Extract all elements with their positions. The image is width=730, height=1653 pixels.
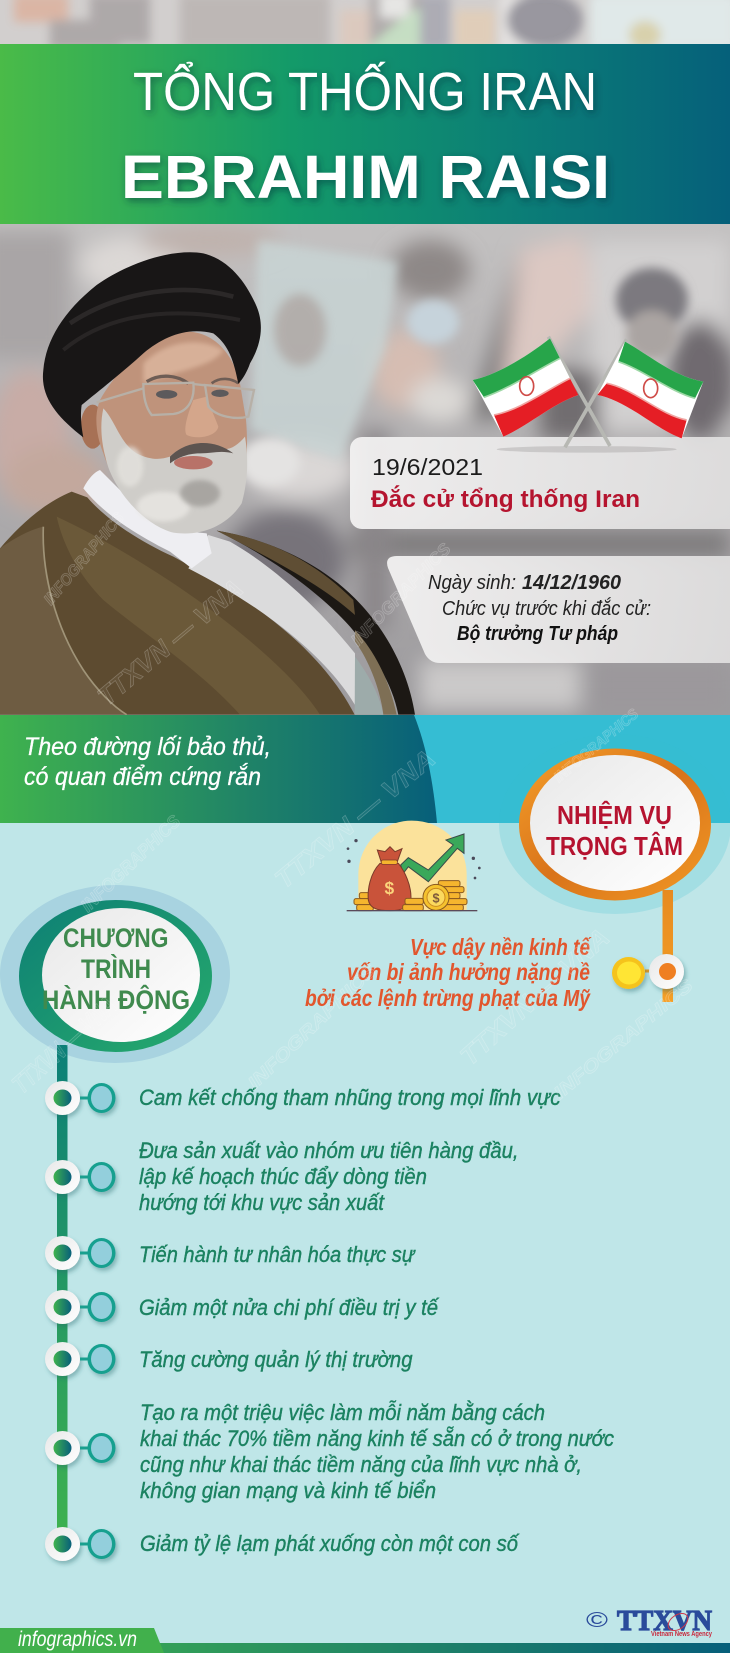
turban bbox=[43, 252, 261, 437]
action item 1: Cam kết chống tham nhũng trong mọi lĩnh vực bbox=[139, 1085, 560, 1110]
watermarks: TTXVN — VNA bbox=[269, 743, 441, 895]
title line 1: TỔNG THỐNG IRAN bbox=[133, 62, 597, 122]
nose bbox=[185, 397, 218, 437]
timeline nodes bbox=[45, 1081, 116, 1561]
badge text line 2: TRÌNH bbox=[81, 953, 151, 984]
orange connector line bbox=[662, 890, 673, 1002]
watermarks: INFOGRAPHICS bbox=[77, 811, 184, 916]
action item 6: cũng như khai thác tiềm năng của lĩnh vực nhà ở, bbox=[140, 1452, 582, 1477]
woman with mask bbox=[240, 438, 300, 486]
coin bbox=[423, 884, 449, 910]
orange halo bbox=[499, 734, 730, 914]
mission text: bởi các lệnh trừng phạt của Mỹ bbox=[305, 985, 591, 1011]
watermarks: INFOGRAPHICS bbox=[347, 539, 455, 650]
money bag bbox=[368, 863, 411, 911]
action item 2: lập kế hoạch thúc đẩy dòng tiền bbox=[139, 1164, 427, 1189]
ground line bbox=[347, 910, 477, 911]
badge: key mission bbox=[519, 748, 711, 900]
band text line 1: Theo đường lối bảo thủ, bbox=[24, 733, 271, 761]
watermarks: TTXVN — VNA bbox=[454, 922, 615, 1071]
footer tab bbox=[0, 1628, 164, 1653]
lips bbox=[174, 456, 213, 469]
title banner bbox=[0, 44, 730, 224]
badge text line 1: NHIỆM VỤ bbox=[557, 800, 672, 830]
crowd photo background bbox=[0, 222, 730, 715]
website: infographics.vn bbox=[18, 1628, 137, 1651]
date: 19/6/2021 bbox=[372, 454, 483, 480]
flags crossed bbox=[473, 337, 703, 453]
card: personal info bbox=[387, 556, 730, 663]
campaign poster bbox=[250, 240, 398, 460]
collar bbox=[83, 470, 212, 568]
poles bbox=[548, 337, 627, 447]
eyes bbox=[156, 390, 177, 399]
sparkle dots bbox=[347, 839, 481, 879]
title line 2: EBRAHIM RAISI bbox=[121, 143, 610, 211]
beard shadow bbox=[180, 480, 220, 507]
previous post label: Chức vụ trước khi đắc cử: bbox=[442, 597, 651, 620]
badge text line 3: HÀNH ĐỘNG bbox=[42, 984, 190, 1015]
action item 6: Tạo ra một triệu việc làm mỗi năm bằng cách bbox=[140, 1400, 545, 1425]
top crowd photo strip bbox=[0, 0, 730, 44]
action item 2 bbox=[139, 1138, 518, 1215]
badge text line 2: TRỌNG TÂM bbox=[546, 831, 683, 861]
previous post: Bộ trưởng Tư pháp bbox=[457, 623, 618, 645]
growth arrow bbox=[401, 834, 464, 882]
portrait of Ebrahim Raisi bbox=[0, 252, 415, 715]
action item 6: không gian mạng và kinh tế biển bbox=[140, 1478, 436, 1503]
robe left bbox=[0, 492, 355, 715]
watermarks: INFOGRAPHICS bbox=[550, 975, 697, 1103]
action item 2: Đưa sản xuất vào nhóm ưu tiên hàng đầu, bbox=[139, 1138, 518, 1163]
birth label: Ngày sinh: bbox=[428, 572, 516, 594]
robe right bbox=[217, 531, 415, 715]
orange node bbox=[612, 954, 684, 989]
watermarks: INFOGRAPHICS bbox=[244, 960, 380, 1093]
timeline line bbox=[57, 1045, 68, 1545]
badge text line 1: CHƯƠNG bbox=[63, 923, 168, 953]
action item 5: Tăng cường quản lý thị trường bbox=[139, 1347, 413, 1372]
coins left bbox=[354, 893, 373, 911]
action item 4: Giảm một nửa chi phí điều trị y tế bbox=[139, 1295, 440, 1320]
money bag and growth icon bbox=[347, 821, 481, 911]
money bag and growth icon: $ bbox=[432, 891, 440, 905]
watermarks: INFOGRAPHICS bbox=[551, 706, 642, 786]
watermarks: TTXVN — VNA bbox=[92, 573, 249, 712]
green halo bbox=[0, 885, 230, 1063]
grey panel bbox=[355, 657, 383, 715]
coin stacks bbox=[403, 881, 467, 911]
action item 7: Giảm tỷ lệ lạm phát xuống còn một con số bbox=[140, 1531, 520, 1556]
white garment bbox=[188, 535, 355, 705]
watermarks bbox=[6, 509, 697, 1103]
election label: Đắc cử tổng thống Iran bbox=[371, 485, 640, 513]
mission text bbox=[305, 934, 592, 1011]
card: election date bbox=[350, 437, 730, 529]
agency logo: Vietnam News Agency bbox=[651, 1631, 712, 1638]
glasses bbox=[97, 383, 254, 418]
action item 2: hướng tới khu vực sản xuất bbox=[139, 1190, 385, 1215]
band text line 2: có quan điểm cứng rắn bbox=[24, 762, 261, 791]
watermarks: TTXVN — VNA bbox=[6, 990, 123, 1099]
money bag and growth icon: $ bbox=[385, 878, 395, 898]
portrait poster bbox=[616, 268, 688, 360]
right flag bbox=[597, 342, 703, 438]
supporter with mask bbox=[407, 300, 459, 344]
badge: action programme bbox=[19, 900, 212, 1052]
green band bbox=[0, 715, 437, 823]
beard bbox=[101, 408, 247, 534]
cyan band right bbox=[400, 715, 730, 823]
agency logo: TTXVN bbox=[617, 1606, 712, 1637]
ear bbox=[81, 405, 105, 449]
footer bar bbox=[0, 1643, 730, 1653]
action item 3: Tiến hành tư nhân hóa thực sự bbox=[139, 1242, 416, 1267]
flag shadow bbox=[497, 446, 677, 453]
left flag bbox=[473, 338, 578, 437]
action item 6 bbox=[140, 1400, 614, 1503]
birth date: 14/12/1960 bbox=[522, 572, 621, 594]
agency logo: © bbox=[586, 1609, 609, 1632]
face bbox=[96, 332, 247, 531]
mission text: Vực dậy nền kinh tế bbox=[410, 934, 592, 960]
mission text: vốn bị ảnh hưởng nặng nề bbox=[347, 959, 590, 985]
action item 6: khai thác 70% tiềm năng kinh tế sẵn có ở trong nước bbox=[140, 1426, 614, 1451]
sun bbox=[358, 821, 467, 910]
watermarks: INFOGRAPHICS bbox=[41, 509, 128, 609]
